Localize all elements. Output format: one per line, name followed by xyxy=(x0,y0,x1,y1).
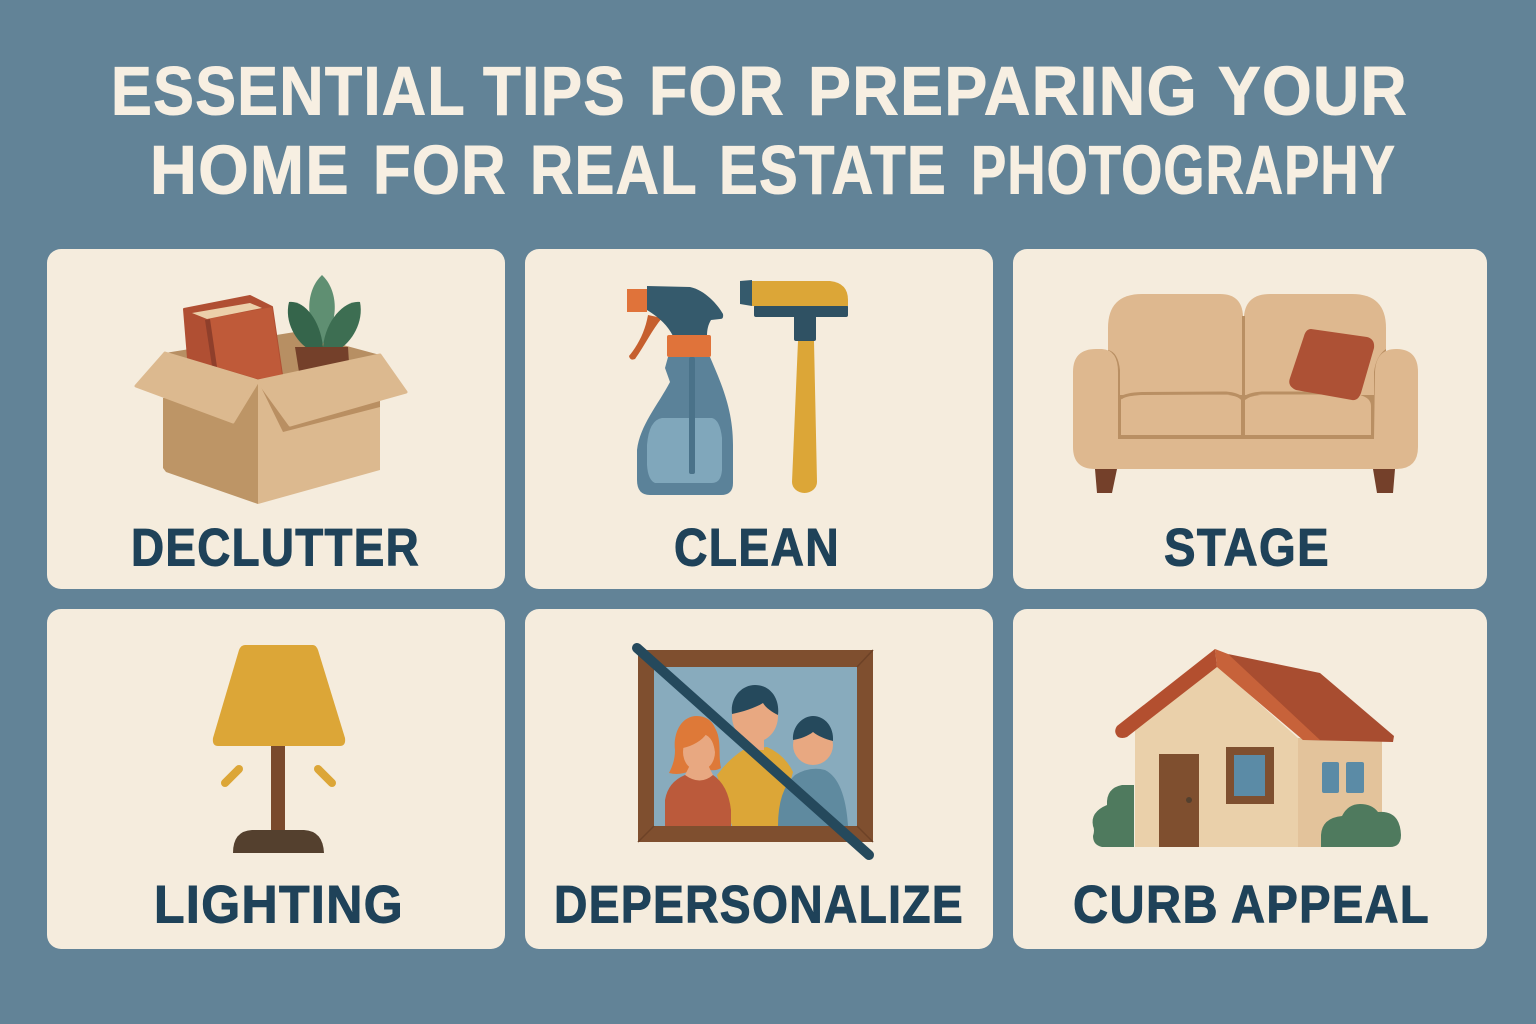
title xyxy=(111,52,1408,208)
light rays xyxy=(225,769,332,783)
child xyxy=(778,716,848,826)
title: PHOTOGRAPHY xyxy=(971,132,1396,208)
title: REAL xyxy=(530,132,698,208)
book xyxy=(184,296,282,379)
title: ESSENTIAL xyxy=(111,52,466,130)
title: TIPS xyxy=(483,52,626,130)
sofa legs xyxy=(1095,469,1395,493)
title: PREPARING xyxy=(808,52,1198,130)
panel: depersonalize xyxy=(525,609,993,949)
icon: table lamp xyxy=(213,645,345,853)
icon: sofa xyxy=(1073,294,1418,493)
title: ESTATE xyxy=(719,132,947,208)
throw pillow xyxy=(1289,329,1374,400)
side windows xyxy=(1322,762,1364,793)
icon: house xyxy=(1093,649,1401,847)
left bush xyxy=(1093,785,1134,847)
label: declutter: DECLUTTER xyxy=(131,518,420,578)
title: FOR xyxy=(649,52,785,130)
label: lighting: LIGHTING xyxy=(154,876,404,934)
panel: clean xyxy=(525,249,993,589)
label: curb appeal: APPEAL xyxy=(1231,876,1430,934)
plant xyxy=(288,275,361,372)
roof xyxy=(1115,649,1394,742)
front window xyxy=(1226,747,1274,804)
label: curb appeal: CURB xyxy=(1073,876,1219,934)
label: stage: STAGE xyxy=(1164,518,1330,578)
title: HOME xyxy=(150,132,350,208)
mother xyxy=(665,716,731,826)
icon: squeegee xyxy=(740,280,848,493)
right bush xyxy=(1321,804,1401,847)
title: YOUR xyxy=(1218,52,1408,130)
label: clean: CLEAN xyxy=(674,518,840,578)
prohibition slash xyxy=(637,648,869,855)
panel: stage xyxy=(1013,249,1487,589)
label: depersonalize: DEPERSONALIZE xyxy=(554,876,964,934)
panel: curb appeal xyxy=(1013,609,1487,949)
father xyxy=(717,685,793,826)
panel: lighting xyxy=(47,609,505,949)
icon: crossed-out family photo xyxy=(637,648,873,855)
label: curb appeal xyxy=(1073,876,1430,934)
icon: cardboard box with book and plant xyxy=(136,275,406,504)
picture frame xyxy=(638,650,873,842)
panel: declutter xyxy=(47,249,505,589)
door xyxy=(1159,754,1199,847)
house walls xyxy=(1135,665,1382,847)
title: FOR xyxy=(373,132,507,208)
icon: spray bottle xyxy=(627,286,733,495)
sofa body xyxy=(1073,294,1418,469)
